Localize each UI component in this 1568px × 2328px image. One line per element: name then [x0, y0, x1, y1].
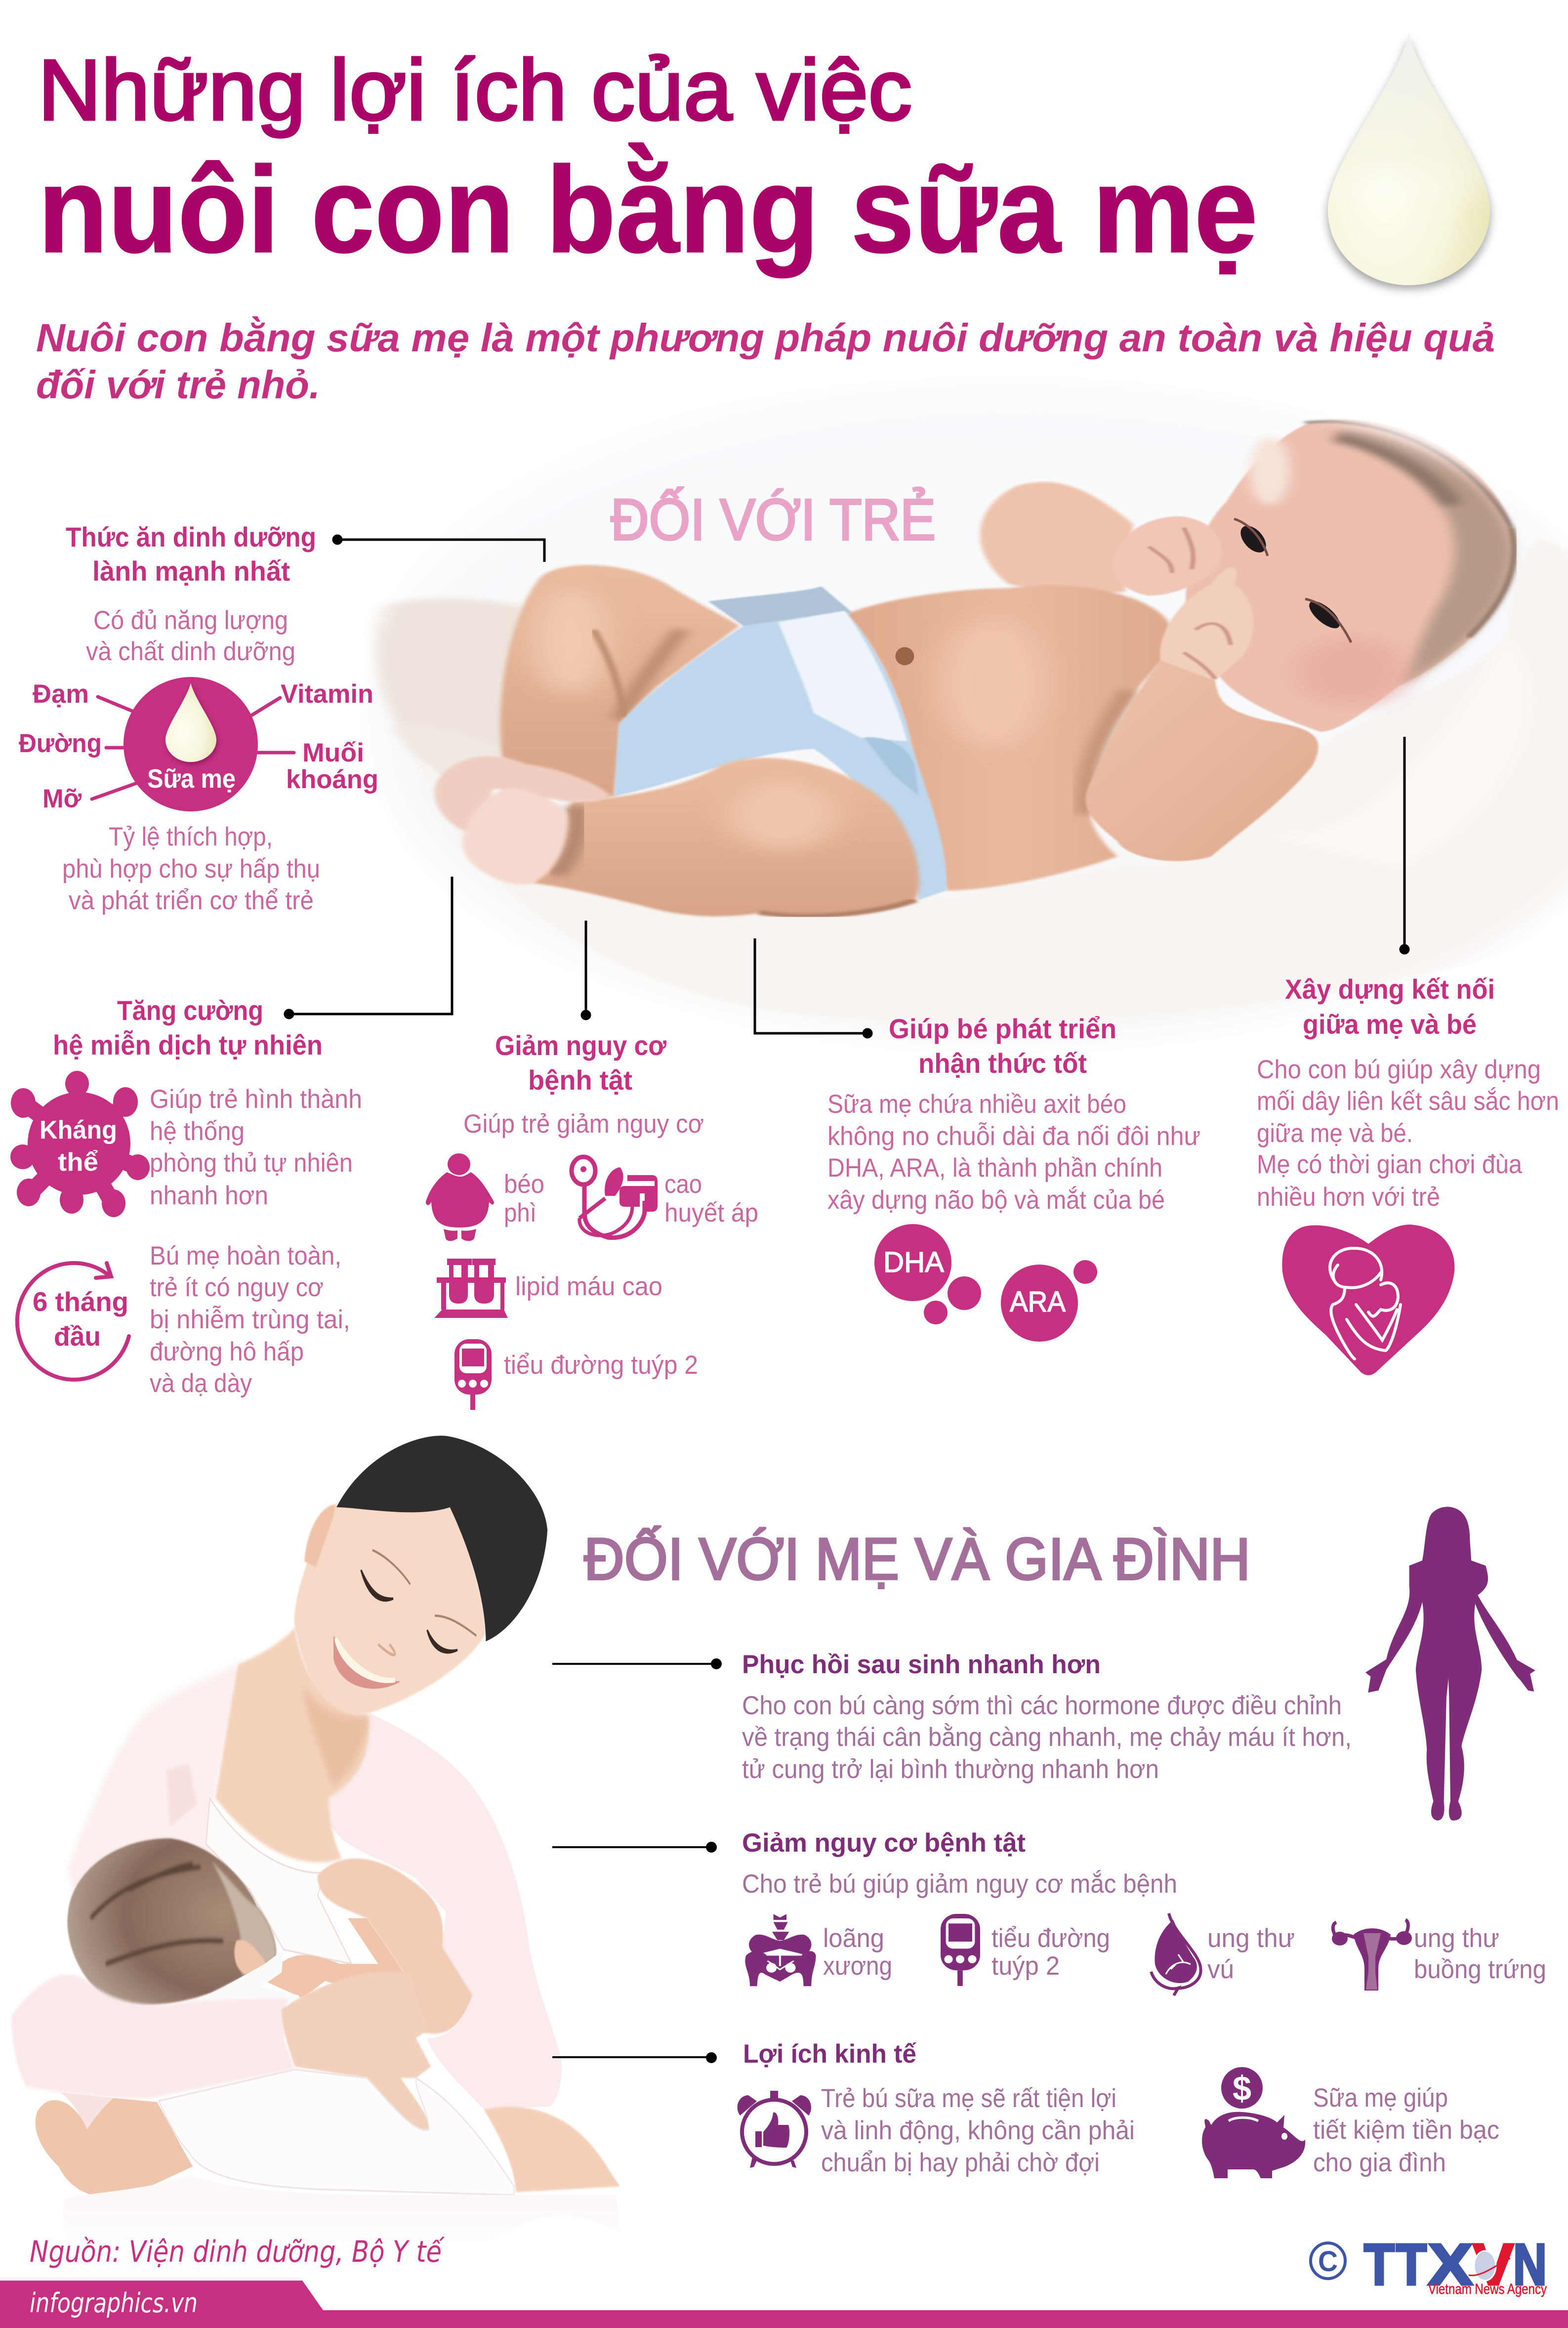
text block [991, 1924, 1110, 1981]
text block: tiểu đường [991, 1924, 1110, 1953]
text block [62, 822, 320, 915]
heading: Phục hồi sau sinh nhanh hơn [742, 1650, 1101, 1679]
heading: Thức ăn dinh dưỡng [66, 521, 316, 552]
text block: tử cung trở lại bình thường nhanh hơn [742, 1755, 1159, 1784]
heading: Lợi ích kinh tế [743, 2039, 917, 2069]
logo: TTXVN: T [1396, 2232, 1427, 2297]
icon: glucose meter [454, 1339, 492, 1410]
blanket [369, 539, 1568, 1022]
text block: Mẹ có thời gian chơi đùa [1257, 1150, 1522, 1179]
milk diagram: Sữa mẹ [147, 764, 236, 794]
text block: đường hô hấp [150, 1337, 304, 1366]
footer bar: infographics.vn [30, 2287, 198, 2319]
leg: raised [500, 565, 740, 800]
text block: Bú mẹ hoàn toàn, [150, 1241, 341, 1270]
text: lipid máu cao [515, 1272, 662, 1301]
text block: chuẩn bị hay phải chờ đợi [821, 2148, 1100, 2177]
photo edge fade [0, 296, 1568, 1186]
milk diagram: Đạm [33, 679, 89, 709]
text block: bị nhiễm trùng tai, [150, 1305, 350, 1334]
text block: và linh động, không cần phải [821, 2116, 1135, 2145]
icon: milk drop [1328, 33, 1490, 285]
text block: và phát triển cơ thể trẻ [69, 886, 314, 915]
icon: six months cycle: đầu [54, 1321, 101, 1352]
text block: nhiều hơn với trẻ [1257, 1183, 1440, 1212]
footer bar [0, 2281, 1568, 2328]
icon: test tubes [434, 1259, 508, 1318]
panel: nutrition [19, 521, 378, 915]
text block: nhanh hơn [150, 1181, 268, 1210]
mother knee [484, 2107, 620, 2192]
belly button [895, 647, 914, 665]
panel: economic benefit [552, 2039, 1499, 2178]
icon: six months cycle [17, 1263, 129, 1380]
text block: vú [1207, 1955, 1234, 1984]
lower leg shading [556, 781, 915, 916]
heading: nhận thức tốt [918, 1048, 1087, 1079]
heading: Tăng cường [117, 995, 263, 1026]
text block: về trạng thái cân bằng càng nhanh, mẹ chảy máu ít hơn, [742, 1723, 1352, 1752]
text block: béo [504, 1170, 544, 1199]
icon: piggy bank with coin: $ [1233, 2069, 1251, 2108]
milk diagram: Mỡ [42, 784, 82, 813]
baby leg [36, 2098, 193, 2198]
text block: và dạ dày [150, 1369, 252, 1398]
lap [64, 2175, 620, 2243]
text block: tuýp 2 [991, 1951, 1060, 1981]
text block [150, 1241, 350, 1398]
lower fade [0, 2201, 643, 2249]
text block: DHA, ARA, là thành phần chính [827, 1153, 1162, 1183]
text block: Sữa mẹ chứa nhiều axit béo [827, 1090, 1126, 1119]
logo: TTXVN [1364, 2232, 1547, 2297]
cardigan [68, 1661, 562, 2110]
finger creases [1149, 528, 1231, 679]
leg: lower [533, 758, 919, 916]
text block: tiết kiệm tiền bạc [1313, 2116, 1499, 2145]
heading: lành mạnh nhất [92, 555, 290, 587]
text block: Có đủ năng lượng [93, 606, 288, 635]
icon: woman silhouette [1365, 1507, 1535, 1820]
baby head [67, 1838, 276, 2005]
text block: Giúp trẻ giảm nguy cơ [463, 1109, 704, 1139]
heading: Giúp bé phát triển [889, 1013, 1116, 1044]
text block: phù hợp cho sự hấp thụ [62, 854, 320, 884]
heading: Giảm nguy cơ [495, 1030, 666, 1061]
text block [1313, 2083, 1499, 2177]
text block: phòng thủ tự nhiên [150, 1148, 353, 1178]
title: Những lợi ích của việc [38, 42, 912, 138]
heading: bệnh tật [528, 1064, 632, 1096]
text block: xương [823, 1951, 892, 1981]
icon: antibody [10, 1071, 150, 1217]
baby collar [193, 1949, 302, 2004]
icon: obesity [426, 1153, 494, 1241]
milk diagram [19, 677, 378, 813]
heading [495, 1030, 666, 1096]
baby body [159, 2070, 514, 2195]
text block: Tỷ lệ thích hợp, [109, 822, 273, 851]
torso [845, 585, 1172, 890]
connector [552, 1843, 716, 1852]
text block: xây dựng não bộ và mắt của bé [827, 1185, 1165, 1215]
icon: uterus and ovaries [1332, 1920, 1412, 1990]
panel: mother baby bond [1257, 974, 1559, 1375]
text block: huyết áp [664, 1198, 758, 1227]
heading: hệ miễn dịch tự nhiên [53, 1029, 323, 1060]
icon: alarm clock with thumb up [738, 2091, 811, 2168]
text block: và chất dinh dưỡng [86, 637, 295, 666]
milk diagram: Muối [302, 738, 364, 767]
text block: hệ thống [150, 1117, 245, 1146]
text block [664, 1170, 758, 1227]
text block [827, 1090, 1200, 1215]
torso shading [938, 618, 1129, 815]
text block [1207, 1924, 1295, 1984]
text block [86, 606, 295, 666]
icon: blood pressure monitor [572, 1157, 658, 1238]
text block: ung thư [1414, 1924, 1499, 1953]
photo: mother holding baby [0, 1436, 643, 2249]
logo: copyright mark [1311, 2243, 1345, 2279]
text block: cho gia đình [1313, 2148, 1446, 2177]
title [38, 42, 1258, 278]
panel: reduced disease risk for mother [552, 1828, 1546, 1995]
icon: glucose meter [941, 1914, 980, 1986]
milk diagram: Đường [19, 729, 102, 758]
milk diagram: khoáng [286, 765, 378, 794]
icon: DHA bubbles: DHA [883, 1246, 944, 1278]
heading: for mother and family: ĐỐI VỚI MẸ VÀ GIA ĐÌNH [584, 1526, 1250, 1592]
logo: TTXVN: T [1364, 2232, 1395, 2297]
text block [150, 1085, 362, 1210]
icon: piggy bank with coin [1202, 2067, 1305, 2178]
icon: ARA bubbles: ARA [1010, 1286, 1066, 1318]
text block [1414, 1924, 1546, 1984]
heading [53, 995, 323, 1060]
text block: Cho con bú càng sớm thì các hormone được điều chỉnh [742, 1691, 1342, 1720]
text block: buồng trứng [1414, 1955, 1546, 1984]
icon: DHA bubbles [874, 1224, 981, 1324]
text block [504, 1170, 544, 1227]
logo: TTXVN: X [1428, 2232, 1473, 2297]
heading: for child: ĐỐI VỚI TRẺ [611, 487, 936, 552]
text block: trẻ ít có nguy cơ [150, 1273, 324, 1302]
mother hand [282, 1972, 431, 2130]
icon: heart with mother and child [1282, 1225, 1454, 1375]
head [1186, 420, 1516, 732]
heading: Xây dựng kết nối [1285, 974, 1495, 1005]
text block: phì [504, 1198, 536, 1227]
text block: không no chuỗi dài đa nối đôi như [827, 1122, 1200, 1151]
icon: bones [745, 1914, 816, 1986]
text block [742, 1691, 1352, 1784]
intro text: Nuôi con bằng sữa mẹ là một phương pháp nuôi dưỡng an toàn và hiệu quả [36, 316, 1495, 360]
face [294, 1504, 486, 1716]
text: tiểu đường tuýp 2 [504, 1351, 698, 1380]
connector [552, 1659, 721, 1668]
mother sleeve [11, 1974, 295, 2098]
title: nuôi con bằng sữa mẹ [38, 141, 1258, 278]
heading [66, 521, 316, 587]
eyes and mouth [333, 1550, 476, 1689]
icon: six months cycle: 6 tháng [33, 1286, 128, 1317]
text block [823, 1924, 892, 1981]
heading: giữa mẹ và bé [1303, 1009, 1477, 1040]
text block: Cho trẻ bú giúp giảm nguy cơ mắc bệnh [742, 1869, 1177, 1899]
feet [435, 756, 611, 885]
hair [336, 1436, 547, 1642]
text block [821, 2084, 1135, 2177]
text block: giữa mẹ và bé. [1257, 1119, 1413, 1148]
neck shadow [302, 1684, 369, 1787]
connector [552, 2053, 716, 2062]
heading [889, 1013, 1116, 1079]
icon: breast [1151, 1913, 1201, 1995]
logo: TTXVN: N [1513, 2232, 1547, 2297]
text block: loãng [823, 1924, 884, 1953]
intro text: đối với trẻ nhỏ. [36, 363, 320, 407]
icon: ARA bubbles [1001, 1260, 1097, 1342]
text block: cao [664, 1170, 702, 1199]
diaper [615, 586, 947, 900]
pink trousers [60, 2092, 191, 2166]
icon: antibody: Kháng [40, 1116, 117, 1144]
logo: copyright mark: C [1318, 2245, 1338, 2278]
mother hand on baby arm [318, 1859, 473, 2034]
arm: upper [980, 482, 1133, 593]
text block: Sữa mẹ giúp [1313, 2083, 1448, 2113]
intro text [36, 316, 1495, 407]
text block: Giúp trẻ hình thành [150, 1085, 362, 1114]
logo: TTXVN: V [1473, 2232, 1514, 2297]
text block [1257, 1055, 1559, 1212]
icon: antibody: thể [58, 1148, 98, 1177]
text block: Trẻ bú sữa mẹ sẽ rất tiện lợi [821, 2084, 1116, 2113]
baby arm [265, 1918, 416, 2010]
heading: Giảm nguy cơ bệnh tật [742, 1828, 1026, 1858]
undershirt [206, 1798, 352, 1964]
panel: reduced disease risk for child [426, 1030, 758, 1410]
arm: lower with hand [1086, 516, 1319, 861]
text block: ung thư [1207, 1924, 1295, 1953]
panel: postpartum recovery [552, 1650, 1352, 1784]
heading [1285, 974, 1495, 1040]
raised leg shading [533, 588, 681, 720]
photo: baby lying on blanket [0, 296, 1568, 1186]
source: Nguồn: Viện dinh dưỡng, Bộ Y tế [30, 2235, 445, 2269]
text block: Cho con bú giúp xây dựng [1257, 1055, 1541, 1084]
panel: cognitive development [827, 1013, 1200, 1342]
chest [215, 1627, 369, 1862]
connector lines [285, 536, 1408, 1037]
baby eyes [1234, 519, 1351, 642]
milk diagram: Vitamin [281, 679, 373, 709]
panel: immunity [10, 995, 362, 1398]
